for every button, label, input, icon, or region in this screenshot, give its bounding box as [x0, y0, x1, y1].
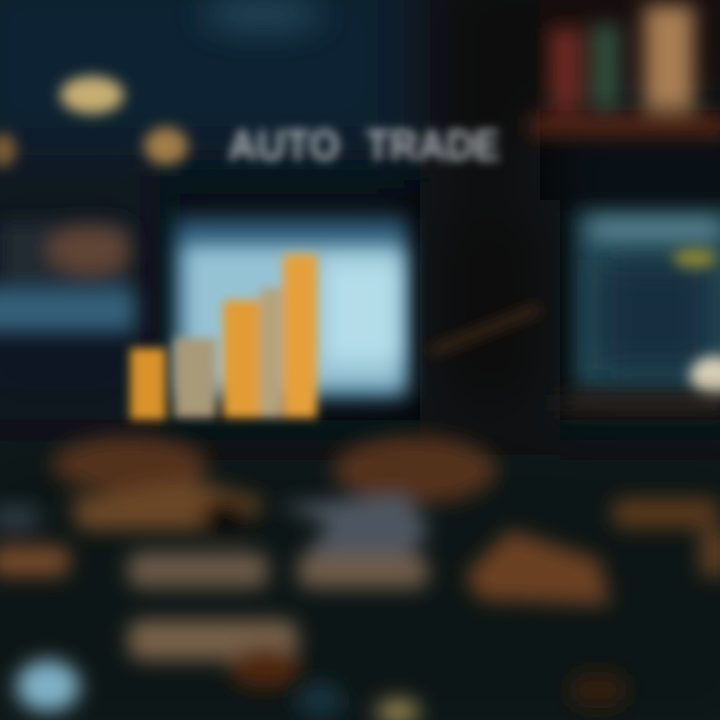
foreground lights	[16, 660, 420, 720]
bar chart	[130, 254, 317, 420]
right wall screen	[560, 210, 720, 412]
diagonal pointer	[430, 308, 540, 352]
central screen	[175, 218, 407, 398]
desks	[0, 436, 720, 708]
left wall panel	[0, 222, 135, 332]
ceiling glow	[200, 0, 324, 32]
title text	[228, 121, 500, 170]
title text: AUTO	[228, 121, 340, 170]
title text: TRADE	[366, 121, 500, 170]
bookshelf with books	[530, 5, 720, 136]
ceiling lamps	[0, 76, 188, 167]
